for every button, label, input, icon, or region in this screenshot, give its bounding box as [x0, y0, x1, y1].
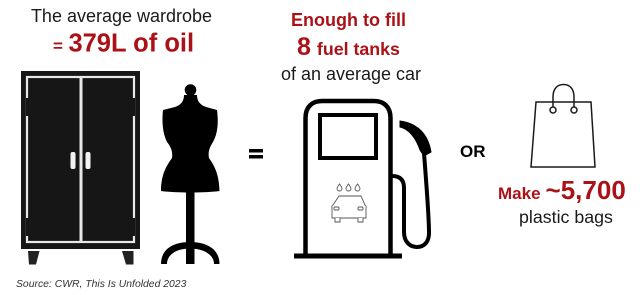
heading: make 5,700: Make~5,700 — [498, 175, 626, 205]
icon: fuel pump — [294, 101, 431, 258]
text: of an average car: of an average car — [281, 64, 421, 84]
icon: shopping bag — [531, 84, 595, 167]
heading: average wardrobe: The average wardrobe — [31, 6, 212, 26]
heading: 8 fuel tanks: 8 fuel tanks — [297, 33, 400, 61]
label: OR: OR — [460, 142, 486, 161]
heading: enough to fill: Enough to fill — [291, 10, 406, 30]
heading: 379L of oil: =379L of oil — [53, 30, 194, 58]
icon: dress mannequin — [161, 84, 220, 264]
icon: wardrobe — [21, 71, 140, 264]
source note: Source: CWR, This Is Unfolded 2023 — [16, 279, 187, 290]
equals sign — [249, 149, 263, 158]
text: plastic bags: plastic bags — [519, 207, 613, 227]
icon: car with drops — [332, 184, 366, 222]
